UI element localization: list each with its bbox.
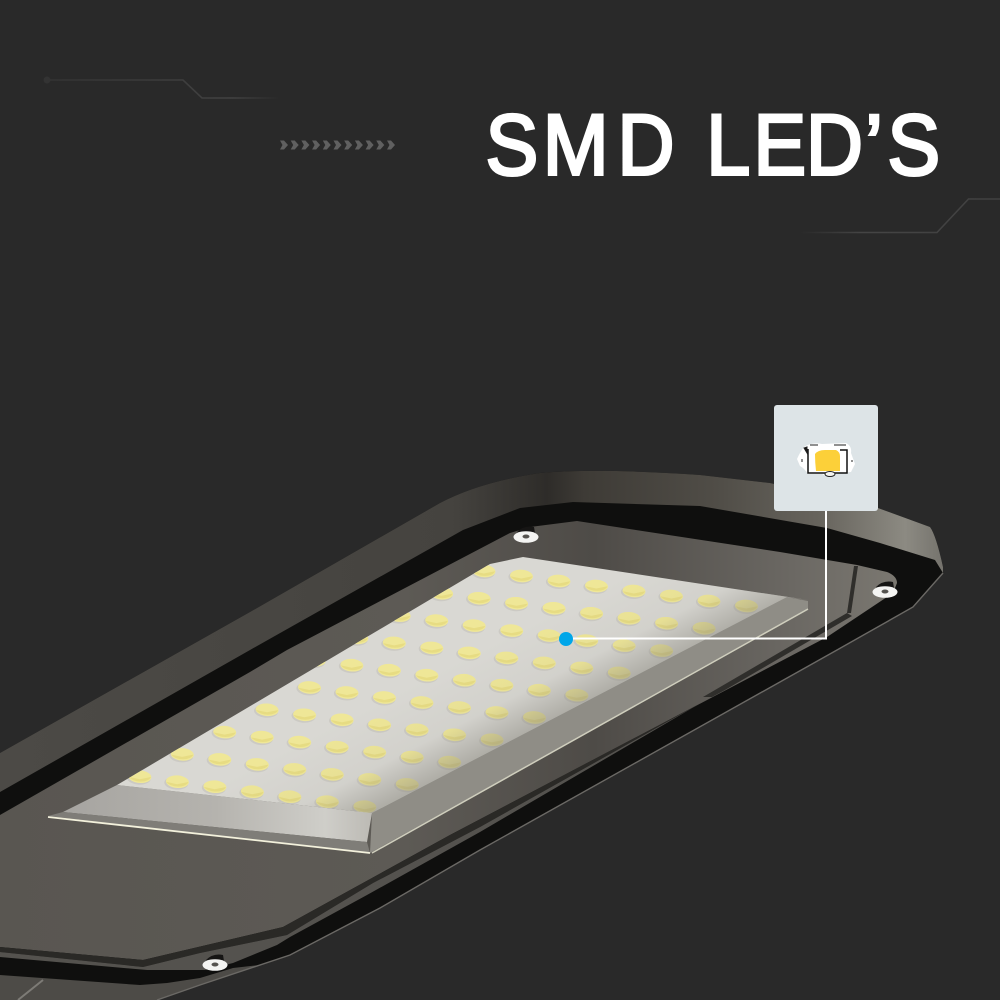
LED panel (48, 557, 808, 853)
decorative circuit line: right (800, 199, 1000, 232)
lower dark band under plate (0, 704, 700, 967)
icon: SMD LED chip (797, 443, 855, 476)
plate lower reflection (703, 613, 852, 697)
street lamp (0, 471, 943, 1000)
title: SMD LED’S (485, 96, 940, 193)
decorative circuit line: top left (44, 76, 278, 98)
inner plate (0, 521, 897, 960)
panel front bevel (63, 785, 372, 842)
chip yellow emitter (815, 450, 840, 471)
decorative chevrons (280, 140, 395, 150)
callout card (774, 405, 878, 511)
lower gray trim strip (0, 704, 700, 970)
screw: right (872, 582, 898, 598)
panel right edge highlight (372, 609, 808, 853)
panel right bevel (370, 597, 808, 853)
panel face (117, 557, 808, 813)
chip outline (808, 449, 847, 473)
lower edge highlight (157, 573, 943, 1000)
chip terminals (802, 445, 853, 476)
upper rim (0, 471, 943, 792)
screw: bottom (202, 955, 228, 971)
chip white halo (797, 443, 855, 476)
lamp arm wedge (18, 980, 43, 1000)
callout connector line (570, 510, 826, 638)
panel front lower strip (48, 812, 370, 853)
LED grid (89, 564, 758, 815)
lamp body silhouette (0, 471, 943, 1000)
callout marker dot (559, 632, 573, 646)
lower rim (0, 965, 260, 1000)
screw: top (514, 527, 538, 543)
panel edge shading (117, 557, 808, 813)
plate right ridge (847, 566, 858, 613)
panel front light line (48, 817, 370, 853)
